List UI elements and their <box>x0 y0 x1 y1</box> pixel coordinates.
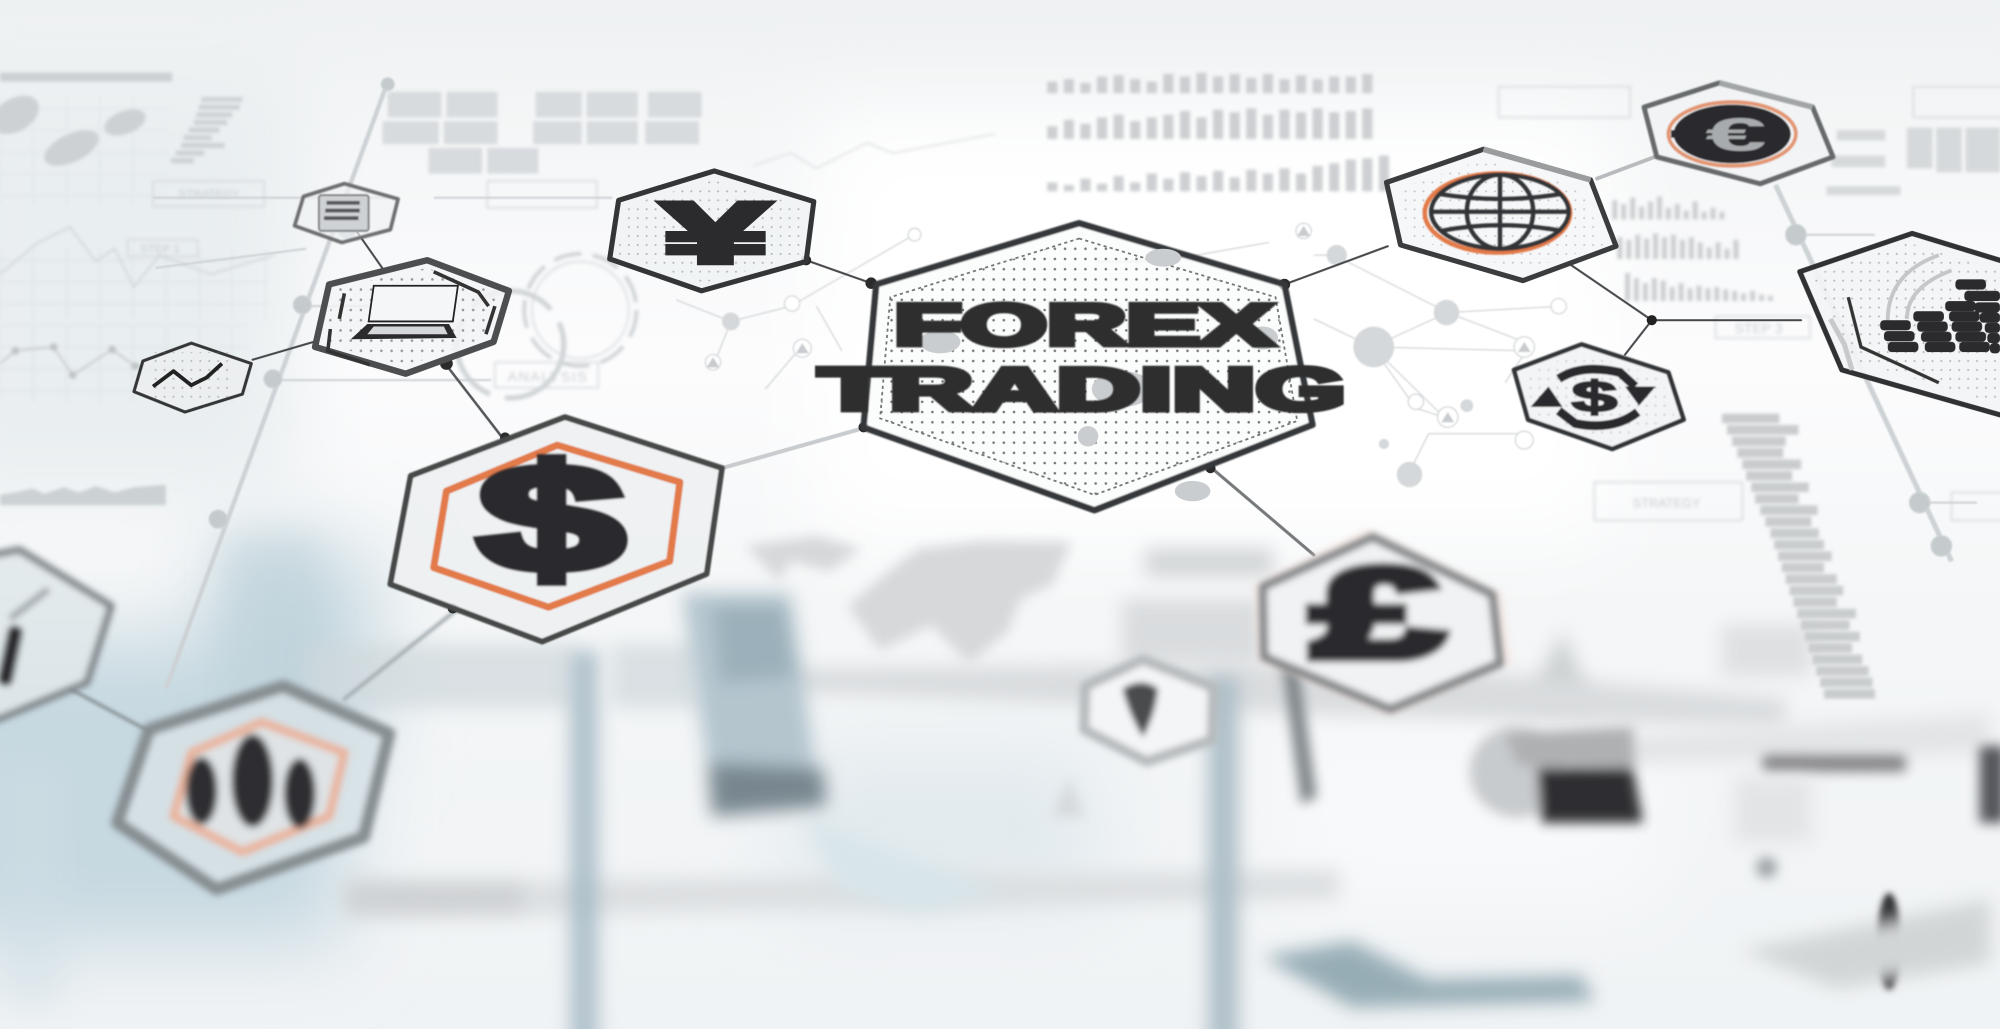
label text: STEP 3 <box>1735 320 1783 336</box>
vertical blue columns <box>570 651 1239 1029</box>
list block <box>171 99 242 161</box>
title: TRADING <box>819 356 1346 423</box>
title <box>819 293 1346 423</box>
icon: laptop <box>351 286 458 339</box>
faint peaks <box>753 134 995 168</box>
network of people nodes <box>676 223 1566 487</box>
hexagon: left blurred arrow <box>0 550 111 719</box>
small dark dot <box>1756 857 1777 878</box>
dark slanted line <box>1281 651 1316 804</box>
hexagon: line chart icon <box>134 343 251 412</box>
table grid <box>383 92 702 173</box>
dark streak <box>1763 755 1906 772</box>
hexagon: pound <box>1253 528 1513 717</box>
teal slab <box>1263 941 1594 1008</box>
icon: zigzag chart <box>153 364 222 386</box>
orange inner <box>173 722 344 852</box>
icon: exchange arrows <box>1531 369 1656 426</box>
grey blobs <box>0 88 149 173</box>
world map <box>746 536 1071 663</box>
triangle marker <box>1052 778 1084 816</box>
icon: euro sign <box>1668 102 1796 166</box>
hexagon: people <box>117 686 389 889</box>
hexagon: euro <box>1644 83 1833 184</box>
dark vertical foreground <box>1878 893 1901 990</box>
top bar charts <box>1052 73 1384 191</box>
connector lines <box>70 156 1801 733</box>
central blurred column <box>682 593 1008 913</box>
left grids and line charts <box>0 96 166 204</box>
orange inner hexagon <box>434 445 680 607</box>
hexagon: dollar <box>390 417 722 642</box>
blurred globe and dark block <box>1469 726 1643 823</box>
structural vertical lines <box>153 78 1977 689</box>
hexagon: small blurred drop <box>1084 659 1213 762</box>
icon: people <box>186 735 315 828</box>
icon: arrow bar <box>0 624 24 687</box>
blurred background: charts and tables, far top <box>0 73 2000 520</box>
label text: STRATEGY <box>179 189 240 201</box>
icon: stacked bars <box>1880 279 2000 353</box>
dial arcs <box>1888 255 1952 325</box>
hexagon: bar blocks <box>1800 233 2000 434</box>
right bottom bars <box>1741 899 1990 989</box>
hexagon: currency exchange <box>1514 344 1684 449</box>
label text: STRATEGY <box>1633 496 1701 511</box>
list block right <box>1722 418 1875 694</box>
grey bar shapes <box>306 548 1811 918</box>
icon: pound sign: £ <box>1312 543 1443 685</box>
icon: euro sign: € <box>1705 109 1767 161</box>
central hexagon <box>819 223 1346 510</box>
table far right <box>1827 128 2000 195</box>
label text: STEP 1 <box>140 244 180 256</box>
label text: ANALYSIS <box>508 368 587 384</box>
icon: dollar sign: $ <box>478 434 624 602</box>
icon: drop <box>1122 682 1158 737</box>
title: FOREX <box>894 293 1273 358</box>
blurred foreground shapes, lower part <box>306 418 2000 1029</box>
top left band <box>0 73 172 82</box>
hexagon: globe <box>1386 149 1616 281</box>
outlined labels <box>128 87 2000 520</box>
hexagon: yen <box>610 171 814 291</box>
icon: globe <box>1425 173 1570 253</box>
right bar charts <box>1615 196 1770 301</box>
hexagon: document icon <box>295 184 398 242</box>
dial <box>457 254 636 398</box>
icon: yen sign: ¥ <box>662 185 769 282</box>
wide horizontal band <box>727 663 1786 727</box>
faint network inside hexagon <box>920 249 1278 501</box>
icon: document <box>319 195 369 231</box>
hexagon: laptop icon <box>315 260 509 374</box>
label text <box>140 189 1783 511</box>
hexagon: currency exchange: $ <box>1571 374 1617 422</box>
